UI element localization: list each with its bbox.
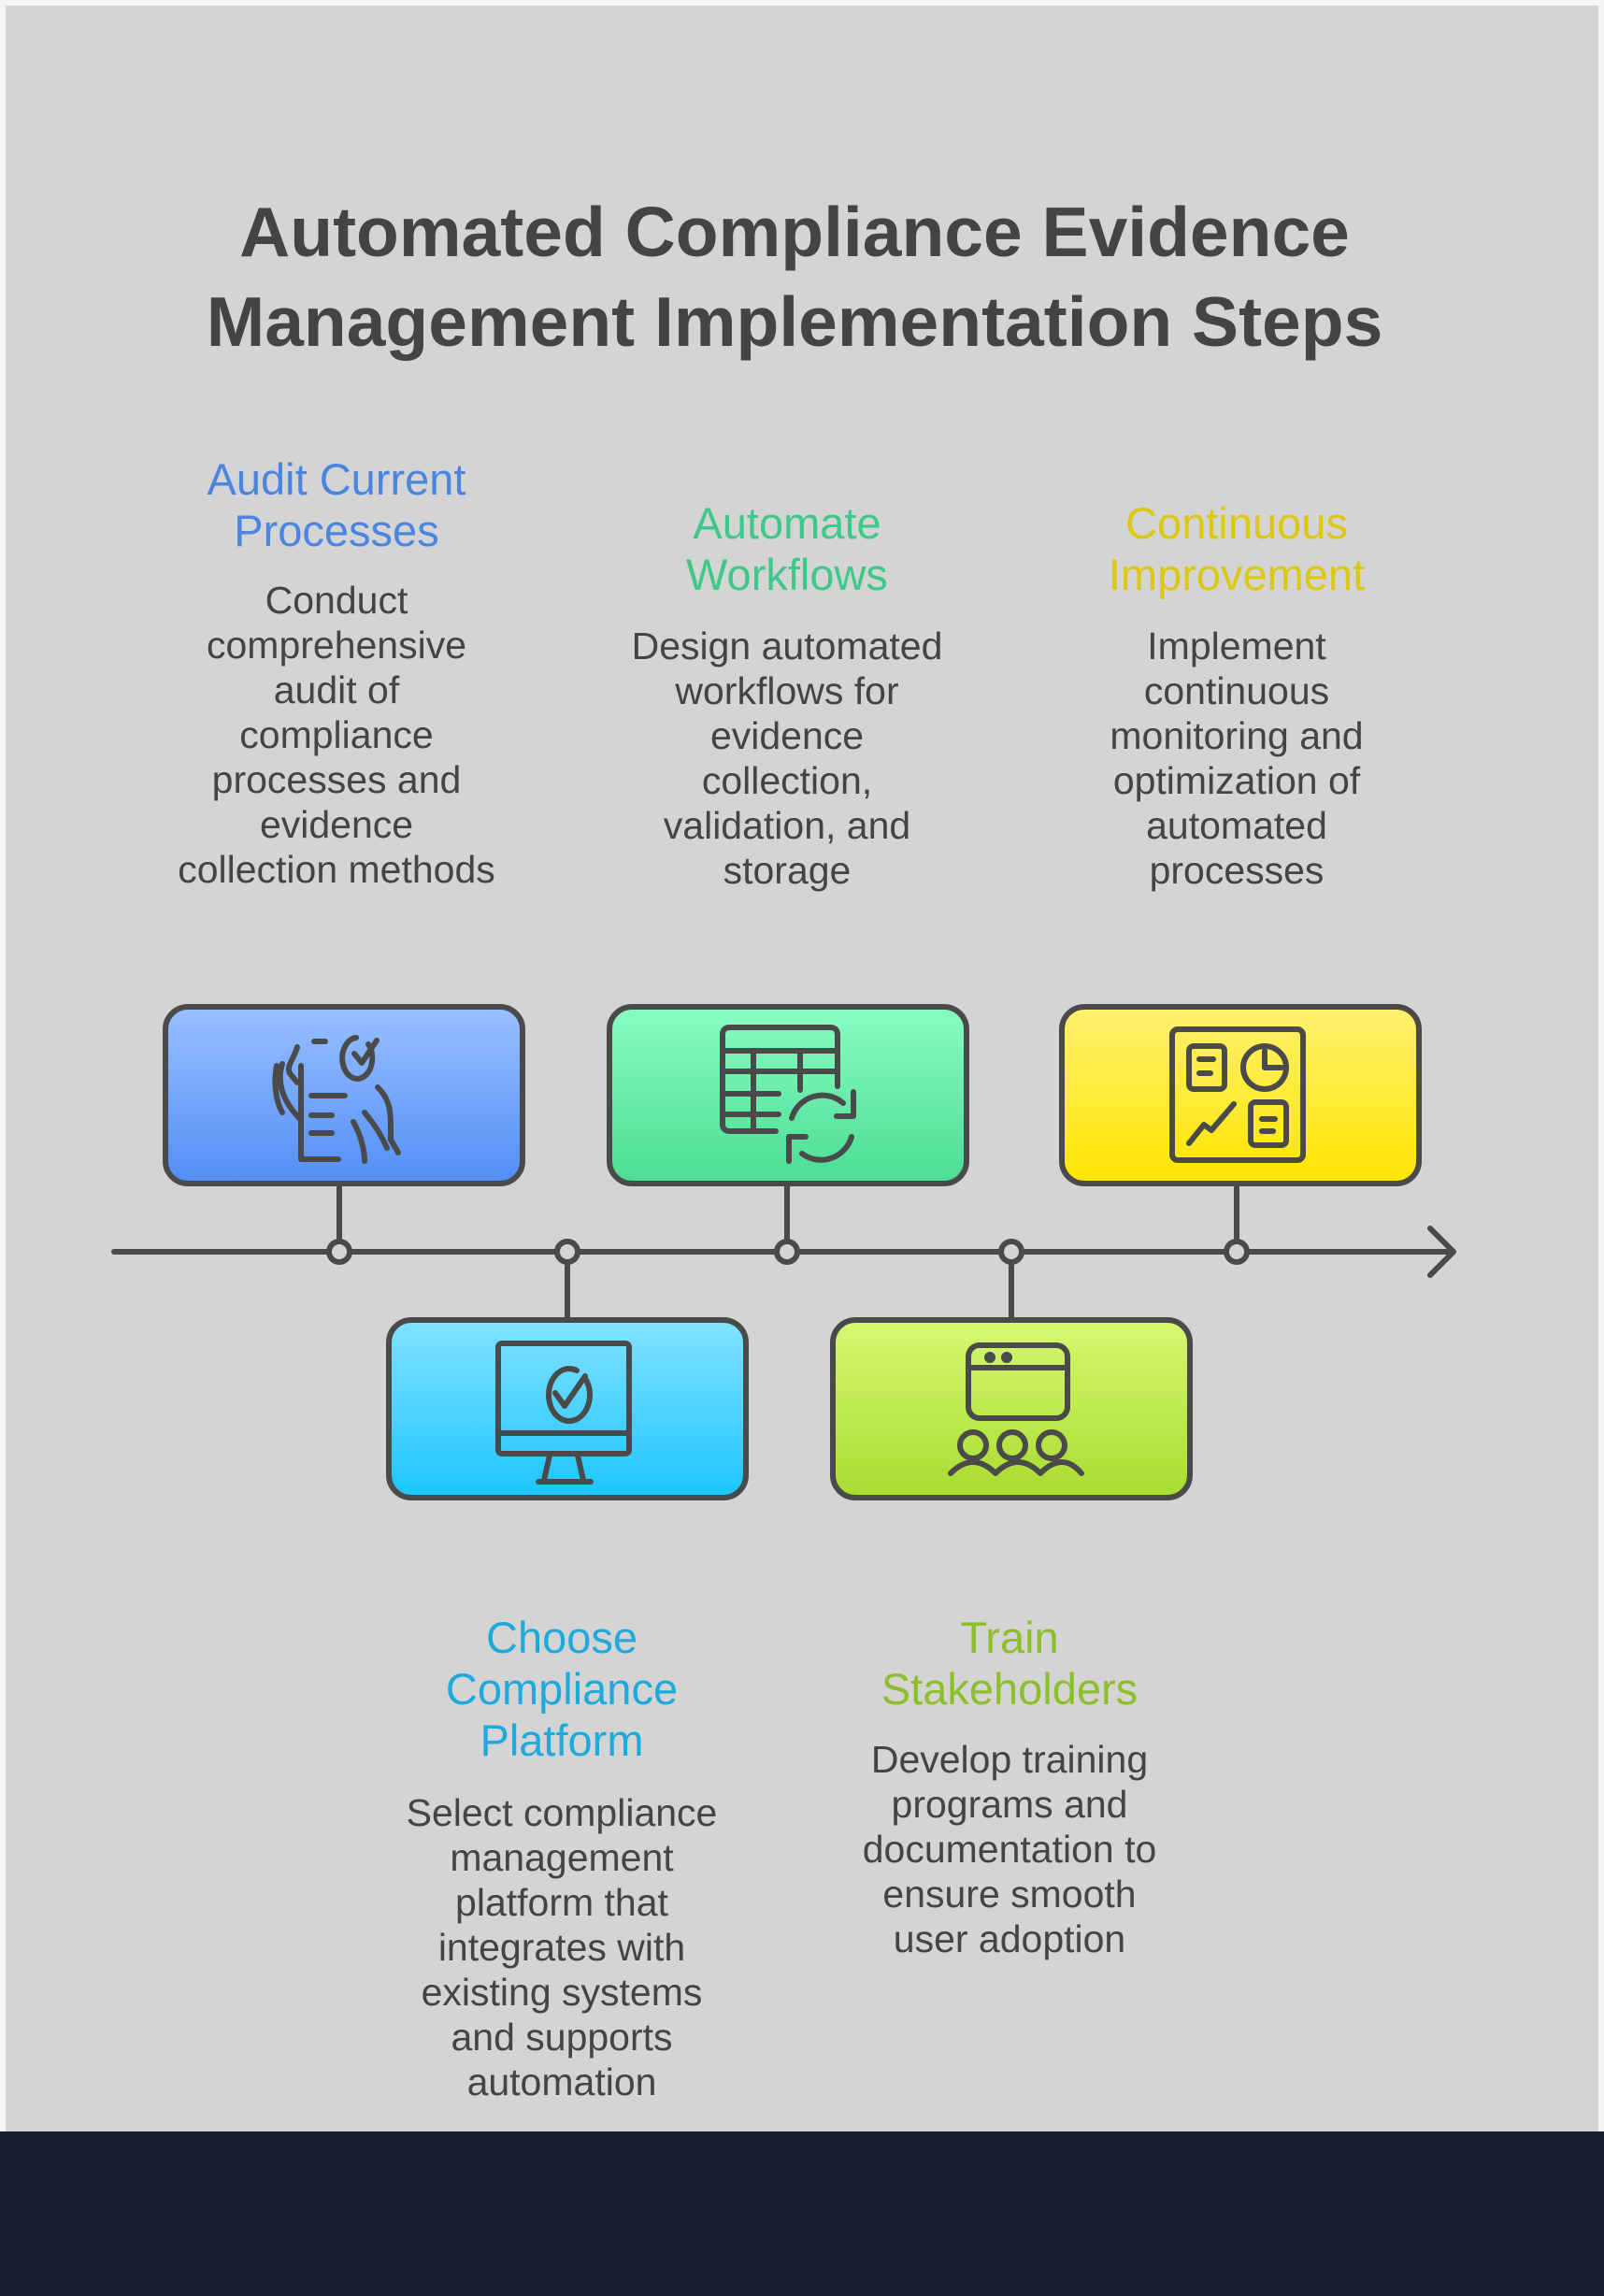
box: choose platform bbox=[389, 1320, 746, 1498]
heading: automate workflows bbox=[686, 498, 888, 599]
text: choose description: management bbox=[450, 1836, 674, 1879]
heading: audit current processes bbox=[208, 454, 465, 555]
title bbox=[207, 193, 1382, 361]
icon: audit document with hands bbox=[275, 1038, 398, 1161]
heading: audit current processes: Audit Current bbox=[208, 454, 465, 504]
text: continuous description: monitoring and bbox=[1110, 714, 1364, 757]
text: train description: programs and bbox=[892, 1783, 1127, 1826]
icon: screen with audience bbox=[951, 1345, 1081, 1473]
title: Automated Compliance Evidence bbox=[239, 193, 1350, 271]
text: choose description: existing systems bbox=[422, 1971, 702, 2014]
text: train description: ensure smooth bbox=[882, 1873, 1137, 1916]
heading: automate workflows: Automate bbox=[693, 498, 881, 548]
text: train description: Develop training bbox=[871, 1738, 1148, 1781]
heading: choose compliance platform: Platform bbox=[480, 1715, 643, 1765]
text: automate description: evidence bbox=[710, 714, 864, 757]
box: train bbox=[833, 1320, 1190, 1498]
heading: audit current processes: Processes bbox=[234, 506, 439, 555]
text: audit description bbox=[178, 579, 495, 891]
heading: continuous improvement: Improvement bbox=[1109, 550, 1365, 599]
heading: continuous improvement bbox=[1109, 498, 1365, 599]
text: audit description: processes and bbox=[212, 758, 461, 801]
text: continuous description: optimization of bbox=[1113, 759, 1360, 802]
text: continuous description: automated bbox=[1146, 804, 1327, 847]
text: audit description: compliance bbox=[239, 713, 434, 756]
text: audit description: comprehensive bbox=[207, 624, 466, 667]
box: audit bbox=[165, 1007, 523, 1184]
text: continuous description: continuous bbox=[1144, 669, 1329, 712]
icon: table with refresh arrows bbox=[723, 1027, 853, 1161]
text: train description: documentation to bbox=[863, 1828, 1156, 1871]
timeline arrow bbox=[114, 1228, 1454, 1275]
text: choose description: Select compliance bbox=[407, 1791, 717, 1834]
text: automate description: Design automated bbox=[632, 624, 942, 667]
text: audit description: collection methods bbox=[178, 848, 495, 891]
text: automate description: storage bbox=[723, 849, 851, 892]
text: train description bbox=[863, 1738, 1156, 1960]
text: audit description: audit of bbox=[274, 668, 399, 711]
icon: dashboard bbox=[1172, 1029, 1303, 1160]
text: audit description: evidence bbox=[260, 803, 413, 846]
connectors bbox=[339, 1185, 1237, 1317]
text: continuous description: processes bbox=[1150, 849, 1324, 892]
text: audit description: Conduct bbox=[265, 579, 408, 622]
text: continuous description bbox=[1110, 624, 1364, 892]
icon: monitor with check bbox=[498, 1343, 629, 1482]
heading: choose compliance platform: Choose bbox=[486, 1613, 637, 1662]
text: train description: user adoption bbox=[894, 1917, 1125, 1960]
text: choose description bbox=[407, 1791, 717, 2103]
text: choose description: automation bbox=[467, 2060, 656, 2103]
heading: choose compliance platform bbox=[446, 1613, 678, 1765]
text: choose description: integrates with bbox=[438, 1926, 685, 1969]
heading: automate workflows: Workflows bbox=[686, 550, 888, 599]
title: Management Implementation Steps bbox=[207, 282, 1382, 361]
heading: continuous improvement: Continuous bbox=[1125, 498, 1348, 548]
box: continuous improvement bbox=[1062, 1007, 1419, 1184]
heading: train stakeholders: Stakeholders bbox=[881, 1664, 1138, 1714]
heading: choose compliance platform: Compliance bbox=[446, 1664, 678, 1714]
text: automate description: collection, bbox=[702, 759, 872, 802]
timeline nodes bbox=[329, 1241, 1247, 1262]
box: automate bbox=[609, 1007, 967, 1184]
text: automate description: validation, and bbox=[664, 804, 910, 847]
text: continuous description: Implement bbox=[1147, 624, 1326, 667]
text: choose description: platform that bbox=[455, 1881, 668, 1924]
heading: train stakeholders: Train bbox=[960, 1613, 1059, 1662]
text: choose description: and supports bbox=[451, 2016, 673, 2059]
text: automate description: workflows for bbox=[675, 669, 899, 712]
heading: train stakeholders bbox=[881, 1613, 1138, 1714]
text: automate description bbox=[632, 624, 942, 892]
